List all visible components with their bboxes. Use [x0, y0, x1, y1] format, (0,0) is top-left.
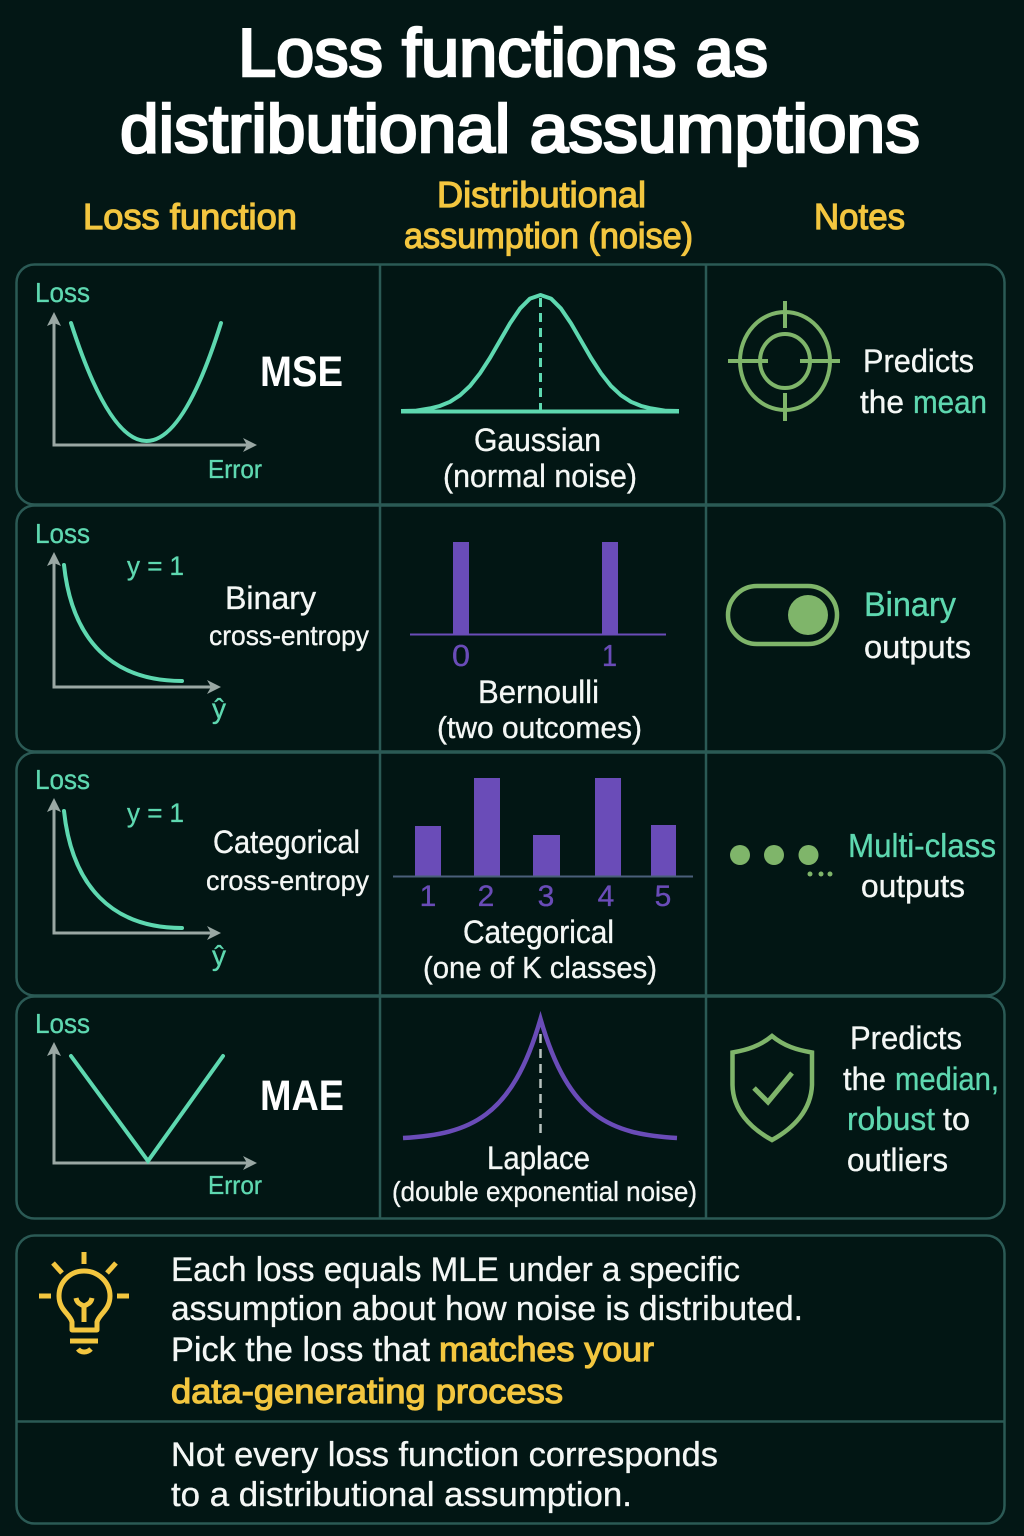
Gaussian label — [443, 422, 637, 494]
column headers: assumption (noise) — [404, 215, 693, 256]
Laplace curve — [403, 1019, 677, 1138]
MSE name: MSE — [260, 348, 343, 396]
title: distributional assumptions — [120, 91, 920, 167]
binary name: Binary — [225, 580, 316, 616]
Bernoulli bars: 0 — [452, 638, 470, 673]
column headers: Notes — [814, 196, 905, 237]
note: predicts the median, robust to outliers: robust — [847, 1101, 935, 1137]
categorical bars: 2 — [478, 880, 494, 913]
note: multi-class outputs — [848, 827, 996, 904]
MSE loss chart: Loss — [35, 277, 90, 308]
Bernoulli bars: 1 — [602, 638, 617, 673]
binary name — [209, 580, 369, 651]
Bernoulli bars — [410, 542, 666, 673]
Laplace label: (double exponential noise) — [392, 1176, 697, 1207]
categorical loss chart: y = 1 — [127, 798, 184, 828]
MAE loss chart: Error — [208, 1170, 262, 1200]
Laplace label: Laplace — [487, 1140, 590, 1176]
Bernoulli label: Bernoulli — [478, 674, 599, 710]
row: categorical cross-entropy — [16, 752, 1004, 996]
footer panel — [16, 1236, 1004, 1524]
takeaway text — [171, 1251, 803, 1411]
takeaway text: assumption about how noise is distributed. — [171, 1290, 803, 1328]
categorical loss chart: Loss — [35, 764, 90, 795]
categorical label: (one of K classes) — [423, 950, 657, 985]
note: predicts the median, robust to outliers: the — [843, 1061, 886, 1097]
note: binary outputs: Binary — [864, 586, 956, 624]
caveat text — [171, 1436, 718, 1514]
row: MSE — [16, 264, 1004, 504]
categorical label: Categorical — [463, 914, 614, 950]
note: predicts the median, robust to outliers: Predicts — [850, 1020, 962, 1056]
categorical loss chart: ŷ — [212, 940, 226, 971]
categorical bars: 5 — [655, 880, 671, 913]
note: predicts the mean — [860, 343, 987, 420]
MAE loss chart — [35, 1008, 262, 1200]
Gaussian label: Gaussian — [474, 422, 601, 458]
Bernoulli label: (two outcomes) — [437, 710, 642, 745]
icon: shield — [732, 1036, 812, 1140]
Laplace label — [392, 1140, 697, 1207]
MAE loss chart: Loss — [35, 1008, 90, 1039]
binary loss chart — [35, 518, 226, 724]
note: predicts the median, robust to outliers: to — [943, 1101, 970, 1137]
icon: light bulb — [39, 1252, 129, 1352]
categorical label — [423, 914, 657, 985]
MSE loss chart: Error — [208, 454, 262, 484]
note: multi-class outputs: outputs — [861, 868, 965, 904]
note: predicts the mean: Predicts — [863, 343, 974, 379]
takeaway text: data-generating process — [171, 1373, 563, 1411]
categorical name: cross-entropy — [206, 865, 369, 896]
Gaussian label: (normal noise) — [443, 458, 637, 494]
note: predicts the median, robust to outliers: outliers — [847, 1142, 948, 1178]
note: predicts the median, robust to outliers: median, — [895, 1061, 999, 1097]
MSE loss chart — [35, 277, 262, 484]
caveat text: to a distributional assumption. — [171, 1476, 632, 1514]
title — [120, 15, 920, 167]
column headers — [83, 174, 905, 256]
binary loss chart: y = 1 — [127, 551, 184, 581]
note: binary outputs — [864, 586, 971, 665]
note: binary outputs: outputs — [864, 629, 971, 665]
categorical bars: 3 — [538, 880, 554, 913]
binary loss chart: ŷ — [212, 693, 226, 724]
binary loss chart: Loss — [35, 518, 90, 549]
note: predicts the mean: the — [860, 384, 904, 420]
icon: dots — [730, 845, 832, 876]
icon: toggle — [728, 586, 837, 644]
takeaway text: Pick the loss that — [171, 1331, 431, 1369]
row: binary cross-entropy — [16, 506, 1004, 752]
note: predicts the median, robust to outliers — [843, 1020, 999, 1178]
takeaway text: matches your — [439, 1331, 654, 1369]
column headers: Loss function — [83, 196, 297, 237]
icon: target — [728, 301, 840, 421]
Bernoulli label — [437, 674, 642, 745]
categorical name — [206, 824, 369, 896]
binary name: cross-entropy — [209, 620, 369, 651]
categorical loss chart — [35, 764, 226, 971]
title: Loss functions as — [238, 15, 768, 91]
categorical name: Categorical — [213, 824, 360, 860]
caveat text: Not every loss function corresponds — [171, 1436, 718, 1474]
MAE name: MAE — [260, 1072, 344, 1120]
categorical bars: 4 — [598, 880, 614, 913]
Gaussian curve — [401, 295, 679, 412]
note: multi-class outputs: Multi-class — [848, 827, 996, 864]
takeaway text: Each loss equals MLE under a specific — [171, 1251, 740, 1289]
note: predicts the mean: mean — [913, 384, 987, 420]
row: MAE — [16, 996, 1004, 1218]
column headers: Distributional — [437, 174, 646, 215]
categorical bars: 1 — [420, 880, 436, 913]
categorical bars — [393, 778, 693, 913]
